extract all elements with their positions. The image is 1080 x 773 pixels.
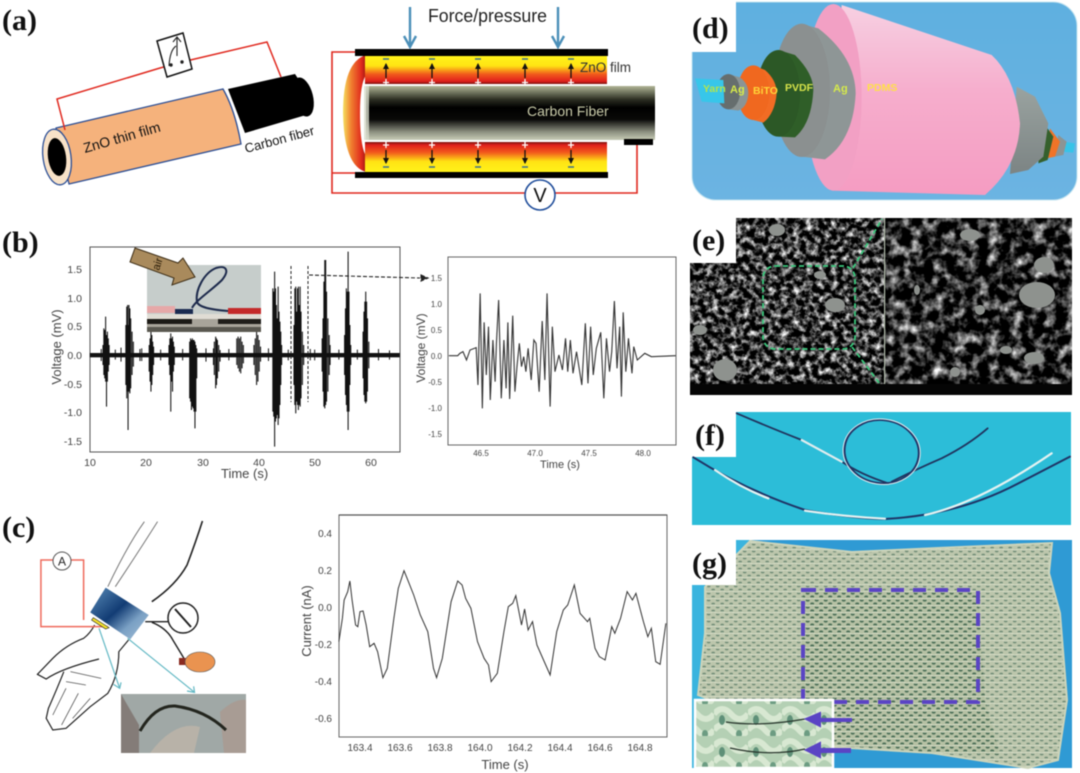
ammeter [53, 552, 71, 570]
arrow: force right [552, 7, 564, 47]
blue background [692, 2, 1077, 200]
inset photo [147, 265, 261, 332]
label: Yarn: Yarn [703, 83, 726, 95]
arrow: air: air [150, 256, 166, 272]
SEM micrographs [690, 218, 1072, 395]
axis title: Voltage: Voltage (mV) [414, 313, 428, 383]
green dashed zoom box [763, 219, 882, 384]
wrist illustration [37, 521, 246, 753]
y ticks labels: 0.0 [67, 350, 82, 362]
layered cylinder [695, 4, 1075, 195]
tube illustration with ZnO film [39, 33, 318, 187]
y tick labels: 1.0 [431, 300, 443, 309]
y tick labels: 0.2 [318, 566, 332, 577]
x tick labels: 164.8 [627, 743, 653, 754]
inflation bulb [179, 652, 215, 672]
sensor region of fabric [800, 592, 1000, 755]
heading (a): (a) [2, 4, 37, 37]
x tick labels: 48.0 [635, 449, 651, 458]
arrow: force left [404, 7, 416, 47]
cross-section diagram [332, 49, 655, 193]
heading (b): (b) [2, 226, 39, 259]
axis title: Time: Time (s) [221, 466, 268, 481]
x tick labels: 47.5 [581, 449, 597, 458]
axis title: Voltage: Voltage (mV) [49, 309, 64, 385]
voltmeter: V [533, 185, 547, 207]
chart: zoomed voltage [414, 257, 676, 471]
axis title: Time: Time (s) [540, 459, 580, 471]
y tick labels: -0.5 [428, 378, 443, 387]
cyan photo background [692, 412, 1071, 525]
x tick labels [347, 743, 653, 754]
label: Carbon fiber: Carbon fiber [243, 123, 317, 156]
blue background [692, 540, 1072, 768]
chart: voltage vs time [49, 247, 400, 481]
heading (e): (e) [692, 224, 725, 257]
arrow: upper purple [806, 713, 851, 726]
y tick labels: -0.4 [315, 677, 332, 688]
axis title: Current: Current (nA) [299, 585, 314, 657]
x tick labels: 163.4 [347, 743, 373, 754]
label: Ag outer: Ag [833, 83, 848, 95]
ammeter: A [58, 554, 66, 568]
x tick labels: 163.6 [387, 743, 413, 754]
fibers [693, 413, 1070, 519]
y ticks labels: 1.5 [67, 264, 82, 276]
x tick labels [84, 457, 377, 469]
chart: current vs time [299, 515, 667, 772]
label: PDMS: PDMS [867, 82, 897, 94]
corner mask [685, 215, 736, 263]
label: Carbon Fiber: Carbon Fiber [527, 103, 609, 119]
panel f: fiber photo [685, 405, 1071, 525]
y tick labels [428, 274, 443, 439]
photo of bent fiber [121, 694, 246, 753]
y tick labels: -0.2 [315, 640, 332, 651]
panel b: voltage response [2, 226, 676, 481]
corner mask [685, 405, 736, 457]
x tick labels: 47.0 [527, 449, 543, 458]
y tick labels: 0.0 [431, 352, 443, 361]
x tick labels: 164.2 [507, 743, 533, 754]
y tick labels [315, 529, 332, 725]
x tick labels: 60 [365, 457, 377, 469]
voltmeter [525, 180, 555, 210]
panel g: knitted textile [685, 535, 1072, 768]
x tick labels: 50 [309, 457, 321, 469]
corner mask [685, 0, 736, 52]
label: Ag inner: Ag [730, 84, 745, 96]
x tick labels: 164.4 [547, 743, 573, 754]
y tick labels: -0.6 [315, 714, 332, 725]
x tick labels [473, 449, 651, 458]
x tick labels: 163.8 [427, 743, 453, 754]
purple dashed box [803, 590, 978, 702]
y tick labels: 0.0 [318, 603, 332, 614]
x tick labels: 46.5 [473, 449, 489, 458]
x tick labels: 20 [140, 457, 152, 469]
pressure gauge [168, 603, 198, 633]
x tick labels: 40 [253, 457, 265, 469]
heading (c): (c) [2, 511, 35, 544]
y tick labels: -1.0 [428, 404, 443, 413]
label: BiTO: BiTO [753, 85, 778, 97]
corner mask [685, 535, 736, 585]
x tick labels: 164.6 [587, 743, 613, 754]
y ticks labels: 0.5 [67, 321, 82, 333]
y tick labels: -1.5 [428, 430, 443, 439]
y tick labels: 0.5 [431, 326, 443, 335]
x tick labels: 10 [84, 457, 96, 469]
heading (f): (f) [695, 419, 725, 452]
panel c: wrist pulse [2, 511, 667, 772]
label: Force/pressure: Force/pressure [428, 6, 547, 26]
y tick labels: 1.5 [431, 274, 443, 283]
label: ZnO film: ZnO film [580, 60, 631, 75]
axis title: Time: Time (s) [481, 757, 529, 772]
label: PVDF: PVDF [785, 82, 814, 94]
y ticks labels: -1.0 [64, 407, 82, 419]
heading (d): (d) [692, 12, 729, 45]
inset close-up [695, 700, 833, 768]
y ticks labels [64, 264, 82, 448]
arrow: lower purple [806, 743, 850, 757]
heading (g): (g) [692, 547, 727, 580]
y ticks labels: -1.5 [64, 436, 82, 448]
y tick labels: 0.4 [318, 529, 332, 540]
x tick labels: 30 [197, 457, 209, 469]
y ticks labels: 1.0 [67, 293, 82, 305]
arrow: air [130, 248, 195, 285]
dashed arrow to zoomed chart [309, 275, 428, 281]
panel a: ZnO carbon fiber device [2, 4, 655, 210]
x tick labels: 164.0 [467, 743, 493, 754]
panel d: coaxial fiber structure [685, 0, 1077, 200]
label: ZnO thin film: ZnO thin film [81, 119, 162, 156]
y ticks labels: -0.5 [64, 379, 82, 391]
panel e: SEM images [685, 215, 1072, 395]
knitted fabric [698, 541, 1067, 768]
